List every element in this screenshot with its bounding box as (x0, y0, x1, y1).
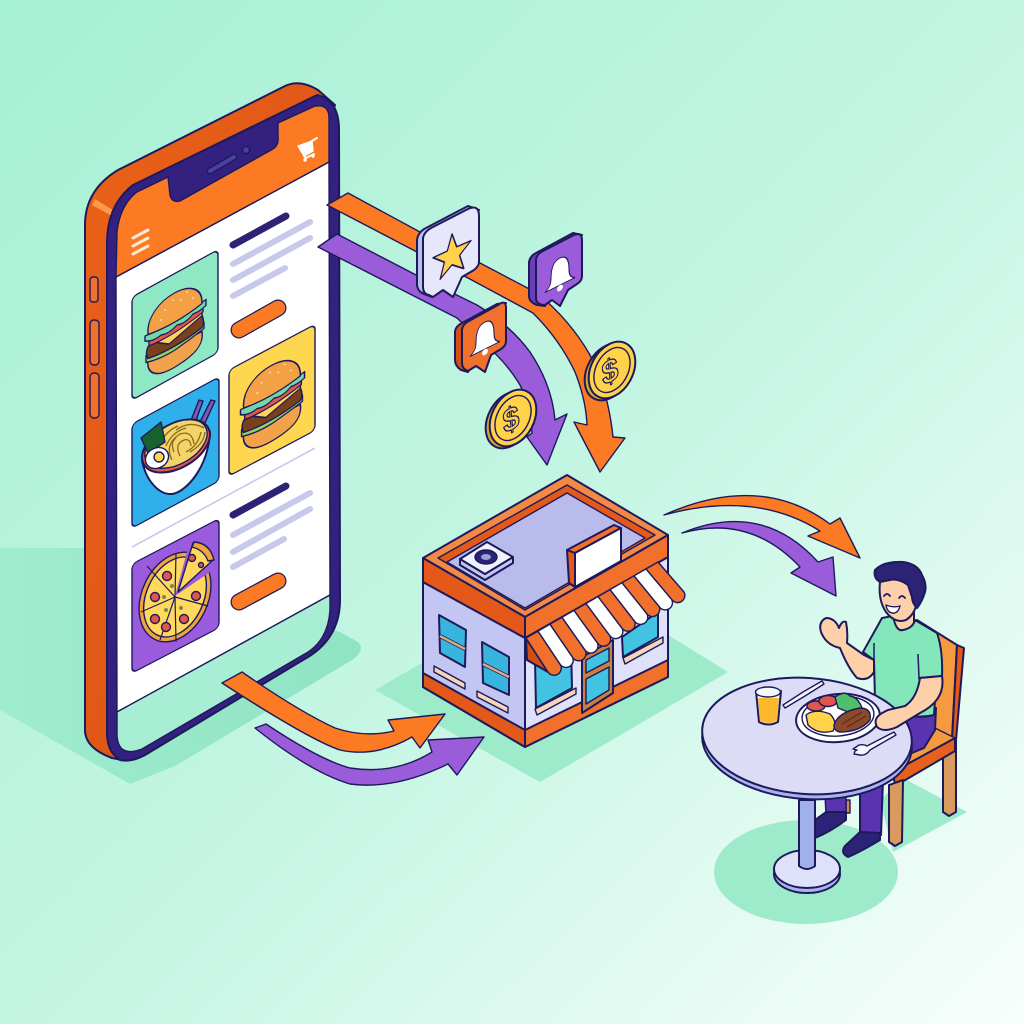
table surface (698, 671, 916, 801)
window right a (535, 645, 572, 708)
order button 2 (239, 581, 278, 602)
icon: menu (133, 230, 148, 254)
burger 2 (240, 349, 305, 457)
roof inner wall (438, 485, 655, 610)
noodle curls (162, 424, 205, 460)
sill right a (535, 688, 576, 715)
bowl rim (133, 408, 219, 484)
awning underside (526, 638, 548, 672)
steak (834, 708, 870, 732)
card: burger yellow (229, 324, 315, 476)
left parapet (423, 558, 525, 638)
slice pepperoni (188, 554, 204, 568)
star (433, 225, 471, 282)
arrow: purple store to customer (682, 522, 836, 596)
nori (141, 422, 165, 453)
steak marks (842, 712, 866, 727)
glass rim (756, 687, 780, 697)
near leg (860, 780, 883, 835)
vent fan (475, 550, 497, 564)
dollar sign: $ (501, 397, 521, 441)
order button 2 fill (239, 581, 278, 602)
arrow: orange phone to store (222, 672, 445, 752)
side button bottom (90, 373, 99, 418)
coin edge (575, 336, 641, 408)
egg (142, 443, 172, 473)
thigh (875, 708, 936, 762)
awning (526, 562, 685, 675)
cheese (131, 547, 219, 647)
store (423, 475, 685, 747)
app header (116, 106, 329, 277)
noodles (137, 410, 215, 478)
phone (85, 83, 340, 761)
screen white area (116, 162, 330, 712)
bubble face (423, 208, 479, 297)
sleeve line (874, 643, 919, 678)
speaker inner (210, 157, 234, 171)
coin ring (587, 341, 637, 399)
bell bubble face (462, 303, 506, 372)
far leg (825, 795, 846, 815)
far shoe (815, 812, 846, 838)
sign face (575, 528, 621, 587)
table base top (774, 850, 840, 888)
card: ramen blue (132, 377, 219, 528)
speaker (210, 157, 234, 171)
pizza (125, 540, 225, 654)
card: pizza purple (132, 519, 219, 673)
coin edge (476, 384, 542, 456)
crust (125, 540, 225, 654)
coin lower left (476, 382, 546, 456)
left base band (423, 673, 525, 747)
roof outer (423, 475, 668, 617)
slices (141, 553, 208, 642)
arrow: purple down to store (318, 234, 567, 465)
text lines block 1 (233, 216, 310, 296)
coin face (480, 382, 546, 454)
raised arm (820, 618, 874, 679)
slice gap (175, 548, 216, 596)
phone ground shadow (0, 548, 361, 784)
sill left 2 (477, 691, 508, 713)
tomato 2 (819, 696, 837, 706)
head (880, 575, 917, 621)
phone bezel (107, 95, 340, 761)
yolk (154, 452, 164, 462)
vent fan center (481, 554, 491, 560)
arrow: orange store to customer (664, 496, 860, 558)
table top (698, 671, 916, 806)
window right b (622, 612, 658, 657)
rice (806, 711, 835, 732)
ramen bowl (133, 400, 219, 494)
rooftop sign (567, 525, 621, 587)
right wall (525, 557, 668, 747)
roof deck (447, 493, 645, 608)
coin ring (488, 389, 538, 447)
divider (132, 448, 315, 547)
smile (886, 605, 900, 613)
greens (835, 693, 862, 712)
right base band (525, 660, 668, 747)
hand on table (876, 676, 943, 730)
table edge (698, 678, 916, 806)
chair seat top (890, 728, 955, 772)
bell bubble side (529, 233, 582, 306)
chair back panel (917, 620, 957, 750)
camera (242, 146, 250, 154)
pepperoni (150, 572, 200, 632)
coin upper right (575, 334, 645, 408)
vent top (460, 542, 513, 574)
fork (853, 732, 896, 755)
chair back right leg (943, 738, 956, 816)
icon: bell (470, 314, 500, 362)
hair (875, 562, 926, 608)
pulled slice (178, 543, 213, 592)
tomato 1 (807, 701, 825, 711)
dollar sign: $ (600, 349, 620, 393)
table pole (774, 800, 840, 893)
person ground shadow (714, 778, 967, 924)
plate rim (794, 690, 882, 746)
side button middle (90, 320, 99, 365)
plate inner (800, 693, 876, 739)
icon: bell (545, 250, 575, 298)
stripes (526, 562, 685, 675)
bubble side (417, 206, 479, 297)
slice crust (192, 542, 214, 561)
near shoe (843, 832, 880, 857)
side button top (90, 277, 98, 302)
text lines block 2 (233, 486, 310, 567)
shirt (863, 616, 942, 717)
table base edge (774, 855, 840, 893)
vent base (460, 557, 513, 580)
bubble: orange bell (455, 303, 506, 372)
knife (783, 681, 824, 708)
table stem (799, 800, 815, 869)
arrow: orange down to store (327, 193, 625, 472)
edge highlight (92, 199, 116, 216)
chair back left leg (846, 800, 850, 813)
bell bubble side (455, 303, 506, 372)
glass (756, 687, 781, 724)
sill left 1 (434, 666, 465, 689)
bowl body (142, 432, 210, 494)
herbs (162, 584, 183, 612)
chair back edge (952, 645, 964, 742)
order button 1 fill (239, 308, 278, 330)
order button 1 (239, 308, 278, 330)
sill right b (623, 637, 663, 664)
chopsticks (186, 400, 215, 436)
chair seat front (893, 738, 955, 786)
plate (794, 690, 882, 746)
icon: cart (298, 138, 317, 161)
door (582, 640, 613, 713)
store ground shadow (375, 630, 728, 782)
card: burger mint (132, 250, 218, 400)
bubble: purple bell (529, 233, 582, 306)
phone body side (85, 83, 335, 760)
arrow: purple phone to store (255, 724, 484, 785)
person (815, 562, 942, 857)
left wall (423, 582, 525, 747)
coin face (579, 334, 645, 406)
bubble: star (417, 206, 479, 297)
sign side (567, 550, 575, 587)
chair (846, 620, 964, 846)
rooftop vent (460, 542, 513, 580)
window left 1 (439, 615, 466, 667)
burger 1 (145, 277, 206, 382)
right parapet (525, 535, 668, 638)
screen bottom area (117, 595, 330, 752)
juice (758, 698, 779, 723)
eyes (884, 594, 905, 598)
window left 2 (482, 642, 509, 695)
bell bubble face (536, 234, 582, 306)
sign top (567, 525, 621, 553)
neck (893, 612, 914, 630)
chair front leg (889, 780, 903, 846)
